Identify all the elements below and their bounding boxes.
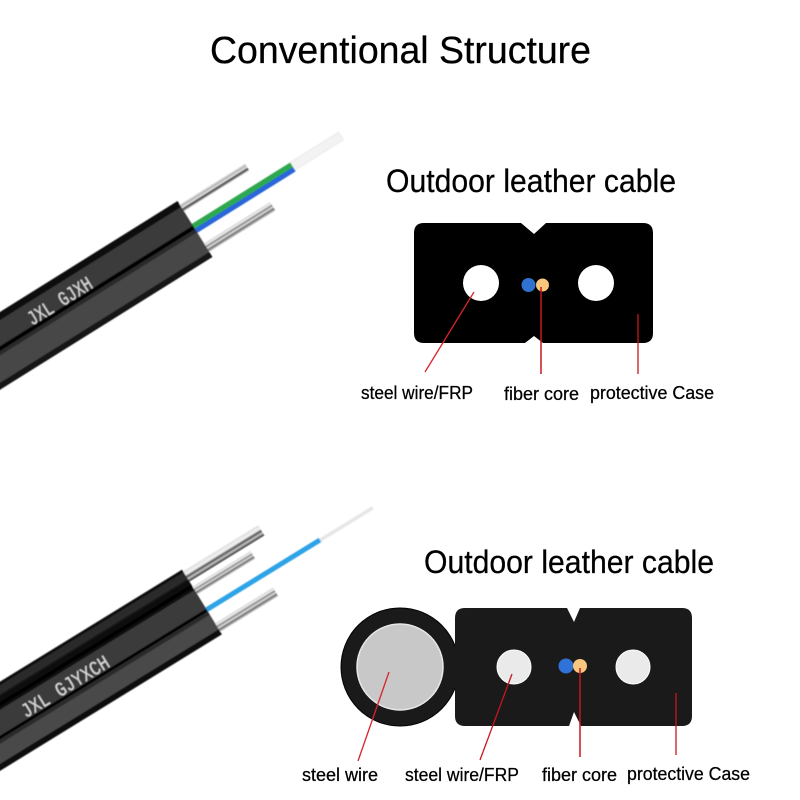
- heading: second cable: Outdoor leather cable: [424, 544, 714, 580]
- bare fiber: [318, 506, 374, 542]
- protective case: [414, 223, 653, 343]
- steel wire lower: [204, 202, 275, 252]
- blue fiber core: [522, 278, 536, 292]
- pointer: protective case: [637, 314, 639, 374]
- pointer: steel wire: [425, 292, 474, 372]
- steel wire upper: [193, 551, 255, 594]
- pointer: steel wire/FRP: [480, 674, 512, 760]
- steel wire hole right: [578, 265, 614, 301]
- label: steel wire/FRP: steel wire/FRP: [405, 765, 519, 785]
- steel wire hole left: [497, 650, 531, 684]
- steel wire hole left: [463, 265, 499, 301]
- label: fiber core: fiber core: [542, 765, 617, 785]
- label: protective Case: protective Case: [590, 383, 714, 403]
- title: Conventional Structure: [210, 30, 591, 72]
- orange fiber core: [573, 659, 587, 673]
- steel wire hole right: [616, 650, 650, 684]
- messenger steel wire: [183, 525, 264, 582]
- blue fiber: [195, 167, 296, 233]
- label: fiber core: fiber core: [504, 384, 579, 404]
- label: steel wire: steel wire: [302, 765, 378, 785]
- cross-section: second cable: [341, 608, 692, 761]
- heading: first cable: Outdoor leather cable: [386, 163, 676, 199]
- illustration: GJYXCH cable: [0, 467, 388, 800]
- cable jacket: [0, 201, 212, 427]
- label: protective Case: protective Case: [627, 764, 750, 784]
- messenger steel wire: [357, 624, 443, 710]
- steel wire upper: [180, 164, 249, 211]
- label: steel wire/FRP: steel wire/FRP: [361, 383, 473, 403]
- cable print: JXL GJXH: [24, 274, 98, 332]
- orange fiber core: [536, 278, 549, 292]
- bare fiber: [288, 132, 343, 171]
- blue fiber: [205, 538, 321, 612]
- illustration: GJXH cable: [0, 109, 359, 427]
- cross-section: first cable: [414, 223, 653, 374]
- green fiber: [192, 162, 293, 229]
- cable jacket: [0, 570, 222, 800]
- pointer: protective case: [675, 693, 677, 755]
- pointer: steel wire: [358, 672, 389, 761]
- cable print: JXL GJYXCH: [18, 652, 115, 724]
- messenger sheath: [341, 608, 459, 726]
- pointer: fiber core: [579, 668, 581, 757]
- blue fiber core: [558, 658, 574, 674]
- protective case: [455, 608, 692, 726]
- steel wire lower: [215, 588, 278, 632]
- pointer: fiber core: [540, 287, 542, 374]
